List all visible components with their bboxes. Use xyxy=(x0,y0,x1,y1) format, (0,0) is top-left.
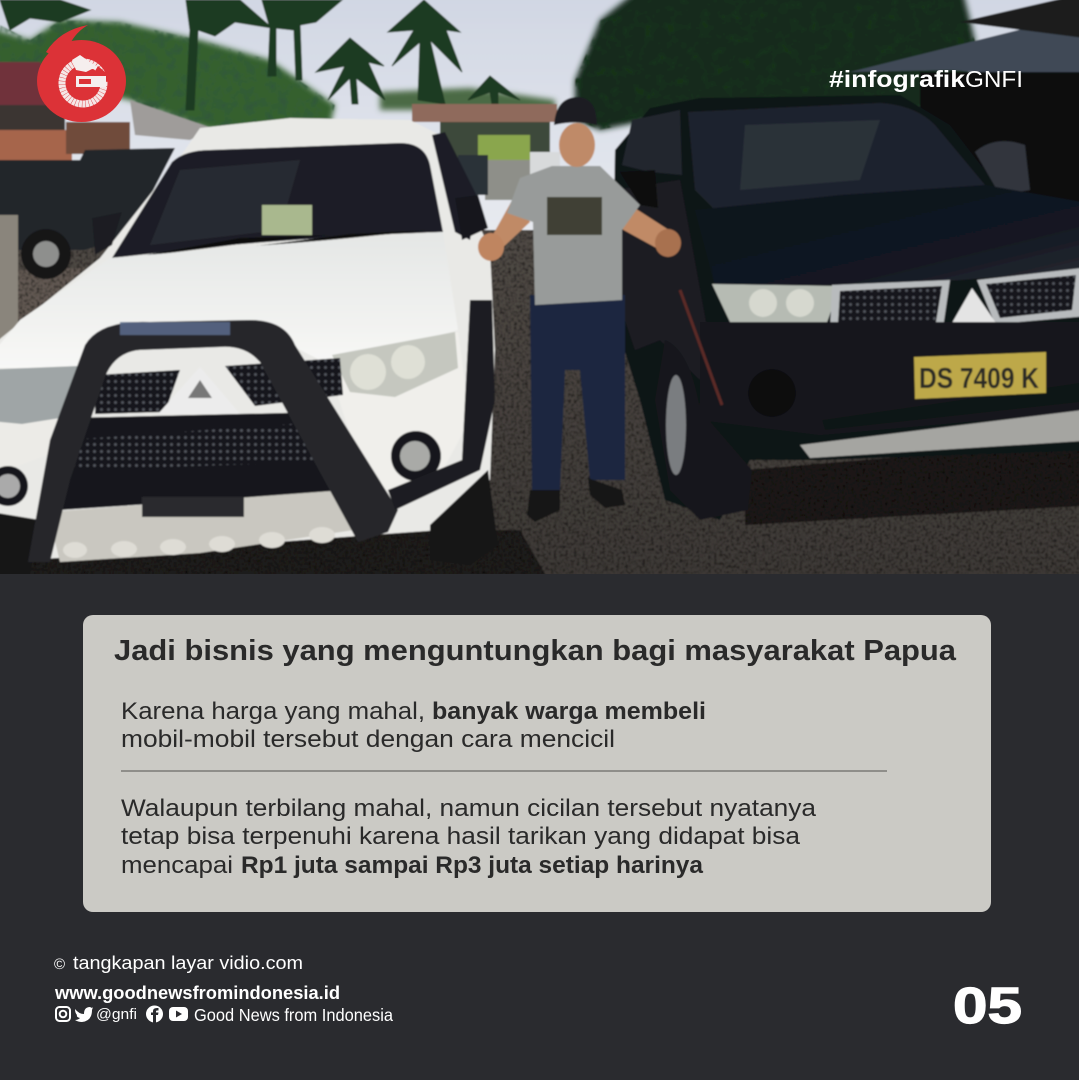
trees xyxy=(0,0,975,130)
building, right xyxy=(850,10,1079,82)
head xyxy=(559,123,595,167)
background white car xyxy=(530,152,560,177)
license plate xyxy=(914,352,1046,399)
foliage texture, left xyxy=(0,20,336,124)
buildings, center xyxy=(412,104,557,122)
foliage texture, right xyxy=(574,16,976,130)
text block: second paragraph: Rp1 juta sampai Rp3 juta setiap harinya xyxy=(241,852,704,879)
website url: www.goodnewsfromindonesia.id xyxy=(54,982,340,1003)
man xyxy=(478,97,681,522)
wipers xyxy=(130,230,430,258)
wheel xyxy=(430,470,498,565)
white SUV xyxy=(0,118,498,574)
black lower lip, left xyxy=(0,510,40,574)
cap xyxy=(554,97,597,125)
text block: first paragraph: Karena harga yang mahal, xyxy=(121,698,425,725)
ground xyxy=(0,230,1079,600)
mirror xyxy=(975,141,1030,195)
page name: Good News from Indonesia xyxy=(194,1005,393,1025)
logo xyxy=(952,288,996,323)
hashtag label: #infografik xyxy=(829,66,965,92)
body xyxy=(0,118,495,560)
side window xyxy=(622,110,682,175)
page number: 05 xyxy=(953,977,1022,1034)
text block: first paragraph: mobil-mobil tersebut dengan cara mencicil xyxy=(121,726,615,753)
hands xyxy=(478,233,504,261)
panel: text card xyxy=(83,615,991,912)
hood xyxy=(695,185,1079,285)
wheel xyxy=(655,340,752,520)
social media row xyxy=(56,1005,393,1025)
headlight xyxy=(712,284,840,333)
front fascia xyxy=(0,368,80,480)
buildings, left xyxy=(0,62,62,110)
bumper xyxy=(700,322,1079,435)
logo: GNFI red badge xyxy=(37,25,126,122)
ground patches xyxy=(18,268,85,340)
credit line: © xyxy=(54,956,65,973)
door xyxy=(615,180,720,400)
handle: @gnfi xyxy=(96,1006,137,1023)
icon: instagram xyxy=(56,1007,70,1021)
icon: youtube xyxy=(169,1007,188,1021)
heading: Jadi bisnis yang menguntungkan bagi masyarakat Papua xyxy=(114,635,957,667)
background black pickup xyxy=(0,148,175,250)
black SUV: DS 7409 K xyxy=(919,363,1039,395)
windscreen xyxy=(688,103,985,210)
text block: second paragraph: tetap bisa terpenuhi karena hasil tarikan yang didapat bisa xyxy=(121,823,801,850)
bull bar xyxy=(28,320,398,562)
door mirror xyxy=(620,170,658,208)
text block: first paragraph xyxy=(121,698,706,753)
dashboard item xyxy=(262,205,312,235)
headlights xyxy=(0,366,78,424)
text block: first paragraph: banyak warga membeli xyxy=(432,698,706,725)
windscreen xyxy=(112,143,443,258)
text block: second paragraph: mencapai xyxy=(121,852,233,879)
body xyxy=(612,95,1079,520)
black SUV xyxy=(612,95,1079,520)
photo: man standing between a white and a black SUV xyxy=(0,0,1079,600)
lower grille xyxy=(60,412,335,510)
side window and mirror xyxy=(432,132,478,240)
skid plate xyxy=(48,490,354,562)
gravel texture xyxy=(0,230,1079,574)
grille xyxy=(830,280,950,330)
hashtag label xyxy=(829,66,1023,92)
shirt xyxy=(507,166,640,305)
arms xyxy=(490,195,530,252)
grille xyxy=(95,370,180,414)
skid plate bumps xyxy=(63,527,335,558)
legs xyxy=(530,295,625,490)
credit line: tangkapan layar vidio.com xyxy=(73,952,303,973)
red cable xyxy=(680,290,722,405)
palm trees xyxy=(0,0,520,110)
hashtag label: GNFI xyxy=(965,66,1023,92)
logo xyxy=(158,367,240,414)
text block: second paragraph: Walaupun terbilang mahal, namun cicilan tersebut nyatanya xyxy=(121,795,817,822)
skid plate xyxy=(800,408,1079,458)
hood xyxy=(0,232,458,368)
icon: facebook xyxy=(146,1006,163,1023)
fog lights xyxy=(391,431,441,481)
shoes xyxy=(527,478,625,522)
text block: second paragraph xyxy=(121,795,817,879)
icon: twitter xyxy=(75,1007,93,1022)
